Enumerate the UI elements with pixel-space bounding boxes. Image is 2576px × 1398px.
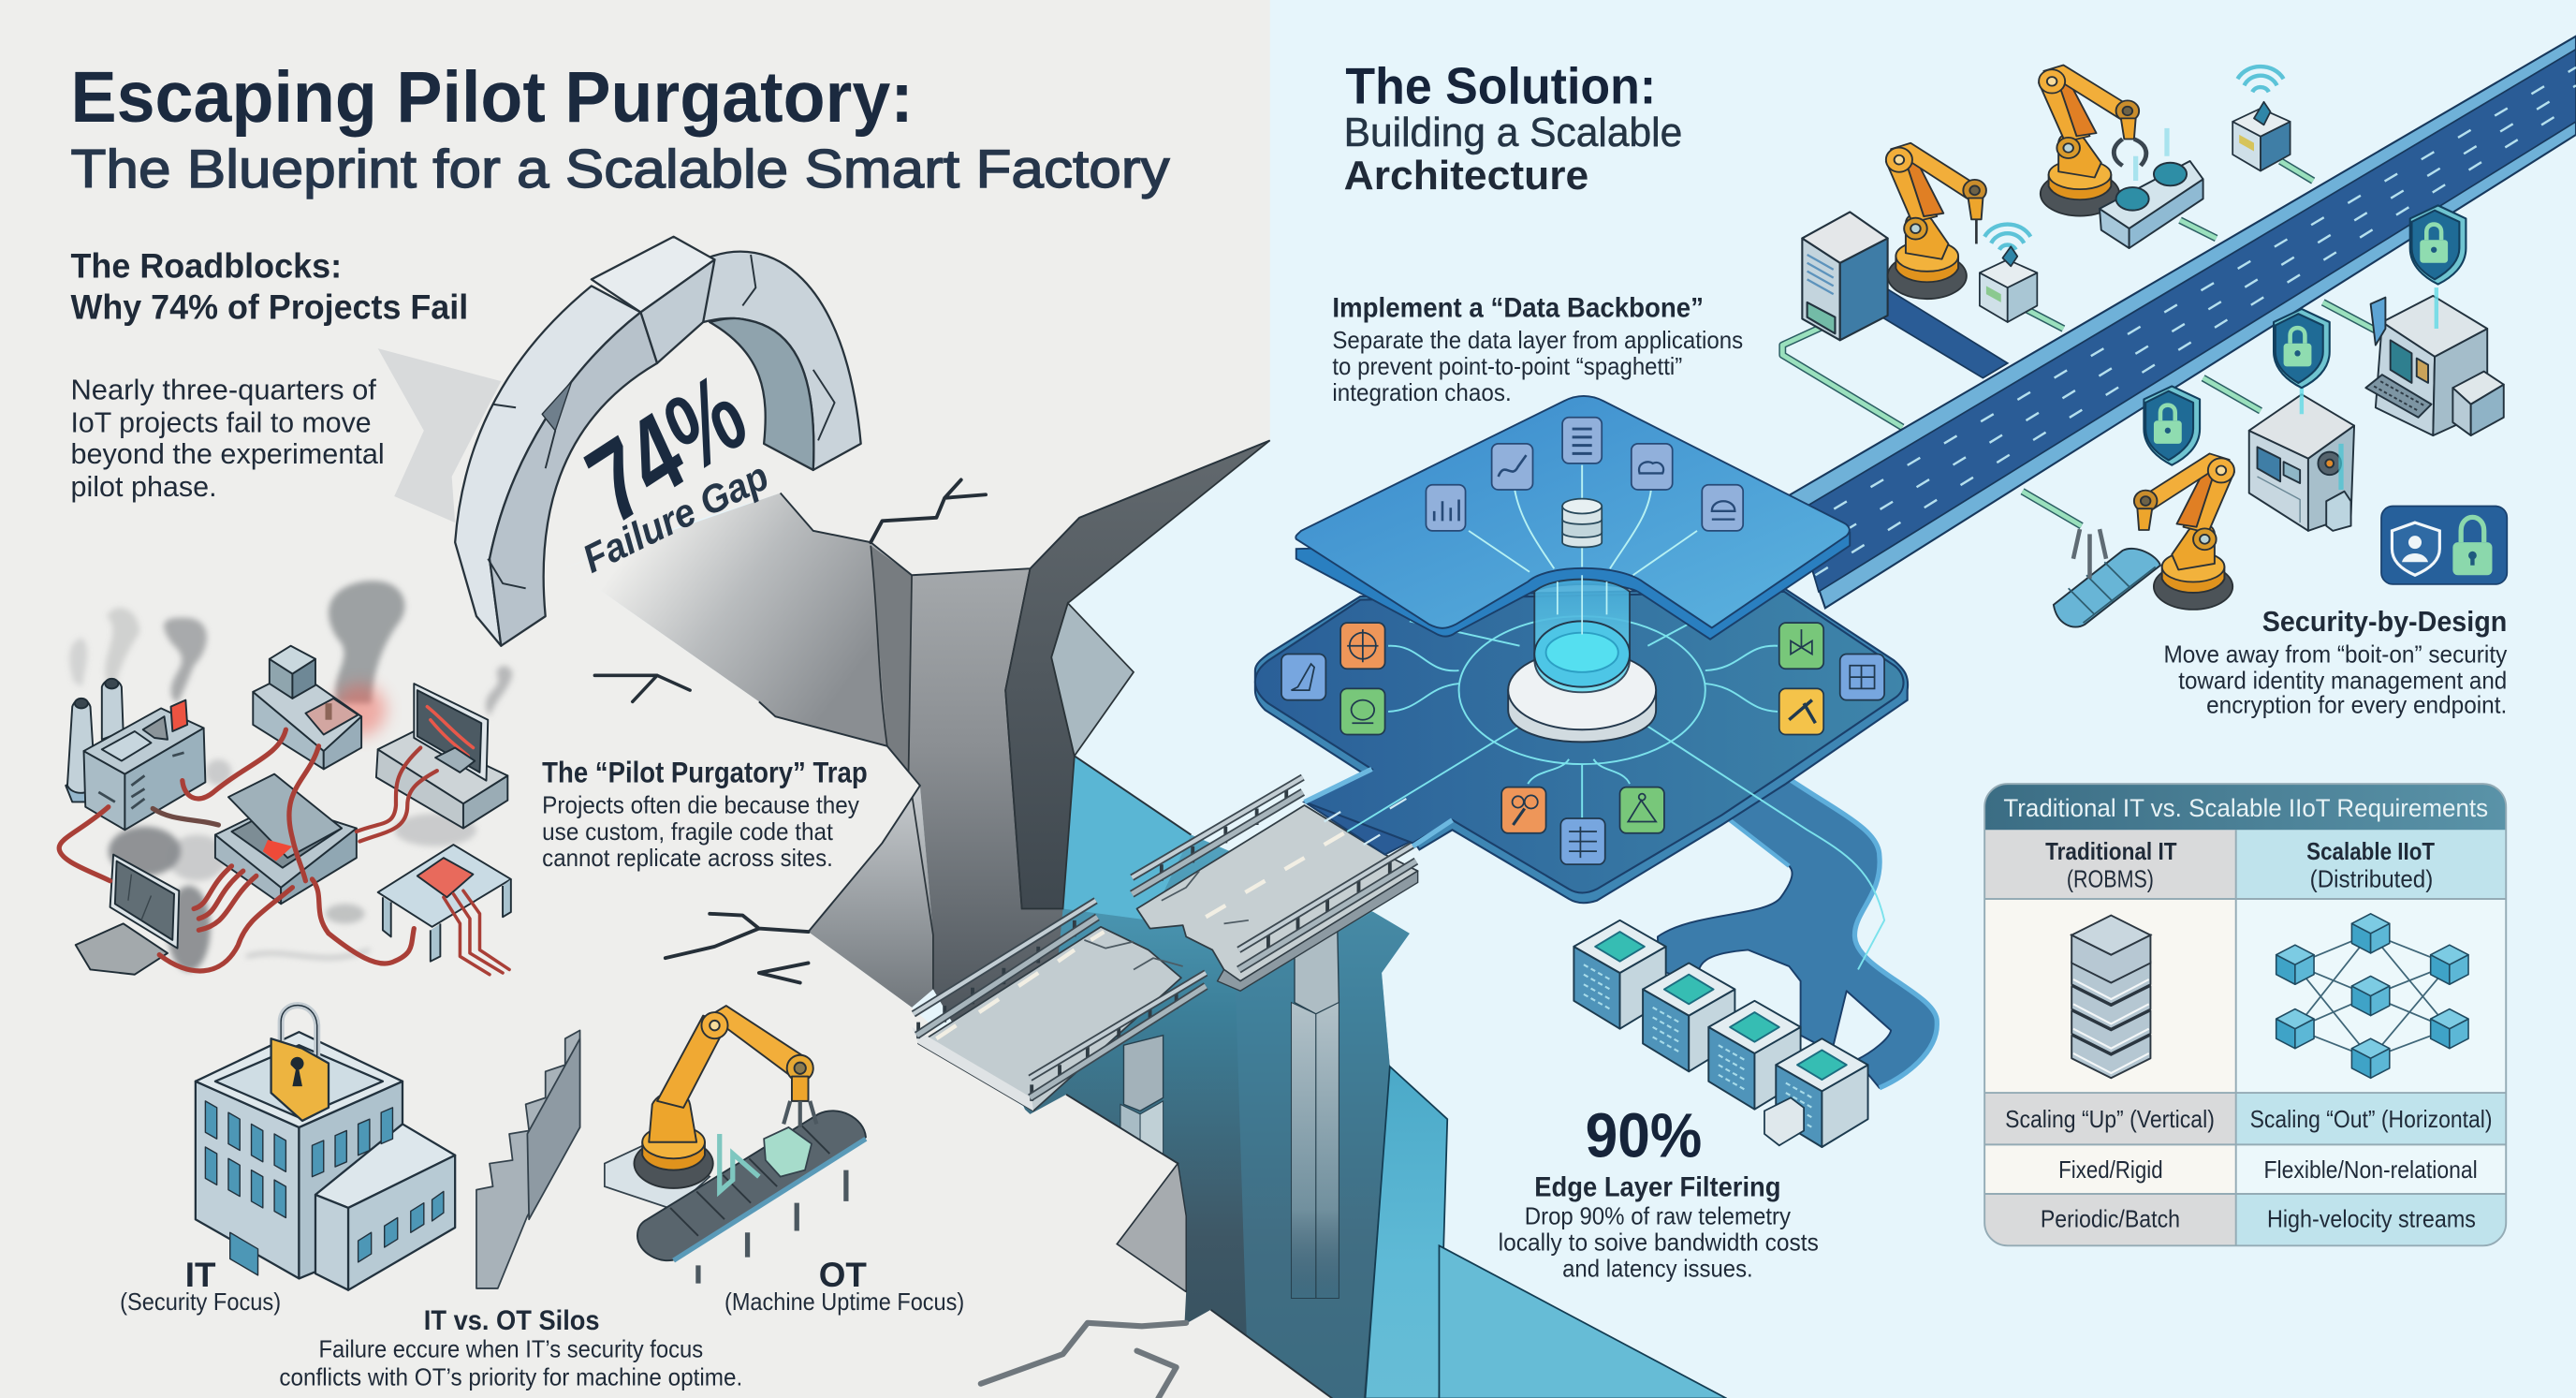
column headers: (Distributed) bbox=[2310, 867, 2433, 893]
table body bbox=[1984, 784, 2506, 1245]
shield 1 bbox=[2410, 205, 2466, 285]
labels: IT and OT: IT bbox=[185, 1256, 216, 1294]
comparison table bbox=[1984, 784, 2506, 1245]
table rows bbox=[2005, 1107, 2492, 1232]
text: implement a data backbone: to prevent point-to-point “spaghetti” bbox=[1332, 354, 1682, 380]
bridge: left broken segment bbox=[912, 901, 1206, 1111]
robot arm C with conveyor bbox=[2054, 453, 2234, 627]
labels: IT and OT: OT bbox=[819, 1256, 867, 1294]
icon: smoke and chaos cluster bbox=[59, 581, 513, 975]
icon: distributed mesh bbox=[2276, 914, 2468, 1078]
icon: turtle-valve bbox=[1340, 688, 1385, 734]
conveyor legs bbox=[698, 1170, 846, 1284]
data lake plate bbox=[1295, 396, 1850, 640]
column headers: Scalable IIoT bbox=[2306, 839, 2435, 865]
edge server 1 bbox=[1573, 920, 1666, 1029]
green package bbox=[764, 1127, 812, 1177]
icon: cloud bbox=[1632, 444, 1673, 490]
table rows: Scaling “Out” (Horizontal) bbox=[2250, 1107, 2492, 1133]
pillar: left bridge bbox=[1120, 1036, 1164, 1184]
heading: the roadblocks: The Roadblocks: bbox=[70, 247, 342, 286]
text: roadblocks body: beyond the experimental bbox=[70, 437, 385, 470]
stat: 90% edge layer filtering: Edge Layer Filtering bbox=[1534, 1172, 1781, 1203]
robot arm bbox=[634, 1006, 813, 1188]
text: IT vs OT silos: conflicts with OT’s priority for machine optime. bbox=[279, 1364, 742, 1391]
text: IT vs OT silos bbox=[279, 1305, 742, 1391]
central junction box bbox=[215, 774, 357, 904]
heading and text: pilot purgatory trap bbox=[542, 755, 868, 872]
server tower bbox=[1802, 212, 1888, 340]
green connector lines bbox=[1782, 161, 2376, 526]
industrial machine 1 bbox=[2365, 287, 2504, 435]
icon: bar chart bbox=[1426, 485, 1466, 531]
text: IT vs OT silos: Failure eccure when IT’s security focus bbox=[318, 1337, 703, 1363]
table rows: Scaling “Up” (Vertical) bbox=[2005, 1107, 2215, 1133]
heading and text: pilot purgatory trap: The “Pilot Purgatory” Trap bbox=[542, 755, 868, 788]
title bbox=[70, 57, 1170, 199]
stat: 74% failure gap: Failure Gap bbox=[576, 453, 775, 581]
jagged silo wall bbox=[476, 1030, 580, 1288]
glass desk with failed chip bbox=[378, 845, 511, 962]
IoT sensor cube 2 with wifi bbox=[1980, 225, 2037, 322]
table header text: Traditional IT vs. Scalable IIoT Requirements bbox=[2003, 793, 2488, 822]
stat: 90% edge layer filtering: Drop 90% of raw telemetry bbox=[1525, 1203, 1791, 1229]
stat: 90% edge layer filtering: 90% bbox=[1586, 1102, 1702, 1171]
factory unit bbox=[66, 679, 205, 830]
conveyor belt bbox=[637, 1111, 866, 1260]
IoT sensor cube 1 with wifi bbox=[2232, 66, 2291, 171]
security shields bbox=[2144, 205, 2466, 465]
chasm: grey cliff face bbox=[567, 440, 1270, 1052]
icon: target bbox=[1340, 623, 1385, 669]
icon: dashboard bbox=[1702, 485, 1743, 531]
data stack icon bbox=[1562, 499, 1602, 547]
icon: valve bbox=[1779, 623, 1823, 669]
robot arm B bbox=[2039, 65, 2146, 216]
table rows: Periodic/Batch bbox=[2041, 1206, 2180, 1232]
IT building bbox=[196, 1006, 455, 1290]
text: implement a data backbone bbox=[1332, 293, 1743, 406]
labels: IT and OT bbox=[120, 1256, 964, 1316]
heading: the solution: Building a Scalable bbox=[1344, 110, 1682, 155]
edge icons bbox=[1281, 623, 1884, 864]
stat: 74% failure gap: 74% bbox=[564, 352, 768, 544]
text: security-by-design: toward identity management and bbox=[2178, 668, 2507, 694]
text: security-by-design: Move away from “boit-on” security bbox=[2163, 641, 2508, 668]
application icons bbox=[1426, 418, 1743, 531]
bridge: right broken segment bbox=[1132, 777, 1418, 991]
text: roadblocks body: Nearly three-quarters of bbox=[70, 373, 376, 405]
crashed monitor and rubble bbox=[76, 855, 179, 975]
heading and text: pilot purgatory trap: use custom, fragile code that bbox=[542, 819, 833, 846]
glass data cylinder bbox=[1534, 575, 1630, 692]
lower platform: edge devices hub bbox=[1255, 588, 1908, 969]
left ground bbox=[0, 0, 1332, 1398]
text: security-by-design: Security-by-Design bbox=[2262, 605, 2507, 638]
labels: IT and OT: (Security Focus) bbox=[120, 1289, 281, 1316]
text: implement a data backbone: Implement a “Data Backbone” bbox=[1332, 293, 1704, 324]
smoke clouds bbox=[69, 581, 513, 971]
column headers: (ROBMS) bbox=[2067, 867, 2154, 893]
icon: network bbox=[1840, 655, 1884, 700]
edge server 2 bbox=[1643, 963, 1734, 1071]
title: Escaping Pilot Purgatory: bbox=[70, 57, 914, 138]
text: roadblocks body: pilot phase. bbox=[70, 470, 217, 503]
red glow bbox=[333, 684, 386, 736]
column headers: Traditional IT bbox=[2045, 839, 2177, 865]
monitor on platform bbox=[376, 684, 507, 829]
lower road to bridge and curved edge road bbox=[1305, 769, 1937, 1088]
grey rock facet bbox=[1117, 1164, 1186, 1291]
cracks in ground bbox=[594, 479, 1186, 1398]
table rows: Fixed/Rigid bbox=[2058, 1157, 2163, 1184]
red tangled wires bbox=[59, 729, 509, 975]
windows bbox=[205, 1101, 444, 1275]
labels: IT and OT: (Machine Uptime Focus) bbox=[724, 1289, 964, 1316]
icon: layout bbox=[1560, 818, 1605, 864]
icon: line chart bbox=[1492, 444, 1533, 490]
circuit rings bbox=[1347, 616, 1884, 969]
heading: the roadblocks bbox=[70, 247, 468, 326]
stat: 90% edge layer filtering: and latency issues. bbox=[1562, 1257, 1753, 1283]
text: implement a data backbone: integration chaos. bbox=[1332, 380, 1512, 406]
icon: tool bbox=[1779, 688, 1823, 734]
heading: the solution: Architecture bbox=[1344, 153, 1588, 199]
shield 2 bbox=[2274, 309, 2330, 388]
data backbone road bbox=[1788, 37, 2576, 608]
text: implement a data backbone: Separate the data layer from applications bbox=[1332, 328, 1743, 354]
broken unit with heat bbox=[253, 646, 361, 769]
text: roadblocks body bbox=[70, 373, 385, 503]
icon: vertical stack bbox=[2071, 916, 2150, 1078]
edge servers bbox=[1573, 920, 1868, 1147]
edge server 3 bbox=[1708, 1001, 1801, 1110]
padlock bbox=[271, 1006, 329, 1121]
chasm: lower teal wall bbox=[986, 756, 1727, 1398]
industrial machine 2 bbox=[2249, 381, 2354, 531]
pillar: right bridge bbox=[1292, 920, 1339, 1298]
heading: the solution: The Solution: bbox=[1345, 58, 1656, 115]
platform bbox=[605, 1140, 710, 1210]
heading and text: pilot purgatory trap: Projects often die because they bbox=[542, 793, 859, 819]
icon: triangle link bbox=[1620, 787, 1664, 833]
table rows: High-velocity streams bbox=[2267, 1206, 2476, 1232]
stat: 74% failure gap bbox=[564, 352, 775, 581]
icon: identity and lock badge bbox=[2381, 507, 2507, 584]
text: security-by-design: encryption for every endpoint. bbox=[2206, 693, 2507, 719]
shield 3 bbox=[2144, 386, 2200, 465]
heading: the solution bbox=[1344, 58, 1682, 199]
central pillar base bbox=[1508, 651, 1656, 742]
column headers bbox=[2045, 839, 2435, 893]
heading and text: pilot purgatory trap: cannot replicate across sites. bbox=[542, 846, 833, 872]
icon: data rows bbox=[1562, 418, 1602, 464]
arch: cracked failure gap bbox=[378, 237, 861, 646]
edge server 4 bbox=[1776, 1038, 1868, 1147]
text: security-by-design bbox=[2163, 605, 2508, 719]
title: The Blueprint for a Scalable Smart Factory bbox=[70, 140, 1170, 199]
icon: gears bbox=[1501, 787, 1546, 833]
text: roadblocks body: IoT projects fail to move bbox=[70, 406, 372, 439]
table rows: Flexible/Non-relational bbox=[2264, 1157, 2478, 1184]
stat: 90% edge layer filtering: locally to soive bandwidth costs bbox=[1499, 1230, 1819, 1257]
stat: 90% edge layer filtering bbox=[1499, 1102, 1819, 1283]
heading: the roadblocks: Why 74% of Projects Fail bbox=[70, 287, 468, 326]
cliff rim line bbox=[759, 440, 1332, 1398]
text: IT vs OT silos: IT vs. OT Silos bbox=[424, 1305, 600, 1336]
icon: arm bbox=[1281, 655, 1325, 700]
robot arm A bbox=[1886, 143, 1986, 299]
OT robot and conveyor bbox=[605, 1006, 866, 1284]
drawer unit bbox=[1764, 1097, 1804, 1145]
coin platform bbox=[2100, 128, 2203, 248]
